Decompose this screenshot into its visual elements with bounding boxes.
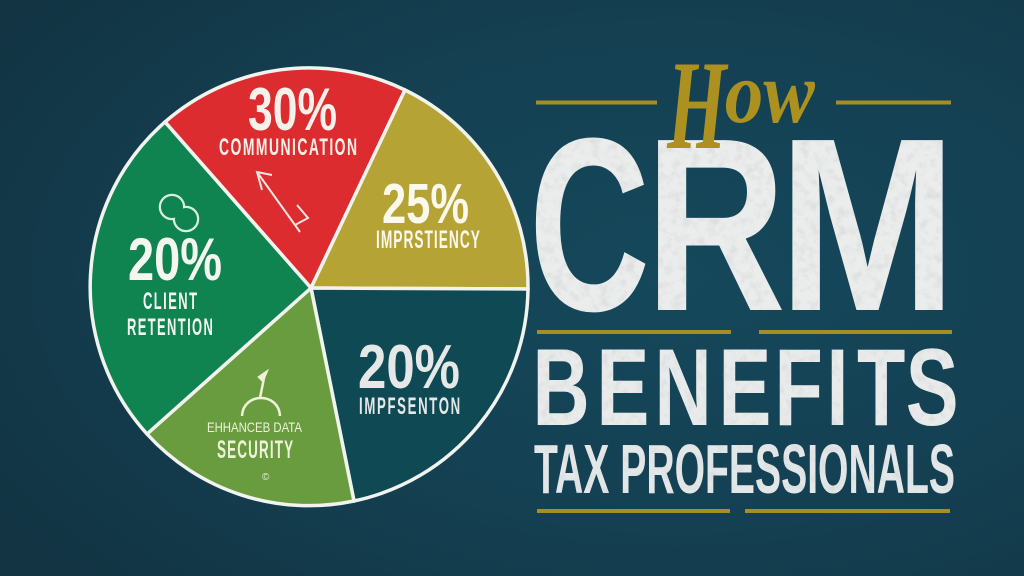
slice: communication 30% xyxy=(165,68,405,288)
slice: client retention 20% xyxy=(90,122,311,434)
slice: enhanced data security xyxy=(147,288,354,506)
icon: arc with arrow xyxy=(242,370,280,416)
label: enhanced data security: EHHANCEB DATA xyxy=(207,419,303,435)
label: 30% communication: 30% xyxy=(248,76,337,143)
title block xyxy=(529,35,959,513)
label: 20% client retention xyxy=(127,226,222,341)
label: enhanced data security: © xyxy=(262,472,270,483)
label: 20% client retention: RETENTION xyxy=(127,315,213,341)
label: 30% communication xyxy=(219,76,357,161)
pie chart xyxy=(90,68,528,506)
slice: efficiency 25% xyxy=(311,90,528,289)
title: CRM xyxy=(529,87,957,363)
label: 25% efficiency xyxy=(376,172,480,254)
gold rules under subtitle xyxy=(537,509,950,513)
label: 25% efficiency: IMPRSTIENCY xyxy=(376,227,480,254)
label: 20% client retention: CLIENT xyxy=(143,289,197,315)
label: 20% implementation: IMPFSENTON xyxy=(359,393,460,420)
gold rules beside How xyxy=(536,100,951,104)
title: CRM: R xyxy=(645,87,786,363)
title: CRM: C xyxy=(529,87,650,363)
label: 25% efficiency: 25% xyxy=(382,172,469,236)
title: BENEFITS: BENEFITS xyxy=(533,326,959,449)
label: 20% implementation xyxy=(358,333,460,420)
label: enhanced data security xyxy=(207,419,303,483)
title: How: H xyxy=(667,35,726,176)
gold rules under CRM xyxy=(537,330,952,334)
label: 20% client retention: 20% xyxy=(128,226,222,293)
title: CRM: M xyxy=(778,87,957,363)
slice: implementation 20% xyxy=(311,288,528,501)
label: 30% communication: COMMUNICATION xyxy=(219,134,357,161)
title: How: ow xyxy=(725,43,815,141)
label: 20% implementation: 20% xyxy=(358,333,460,402)
icon: overlapping circles xyxy=(160,195,198,231)
label: enhanced data security: SECURITY xyxy=(217,437,294,464)
icon: arrow with hook xyxy=(257,172,308,232)
